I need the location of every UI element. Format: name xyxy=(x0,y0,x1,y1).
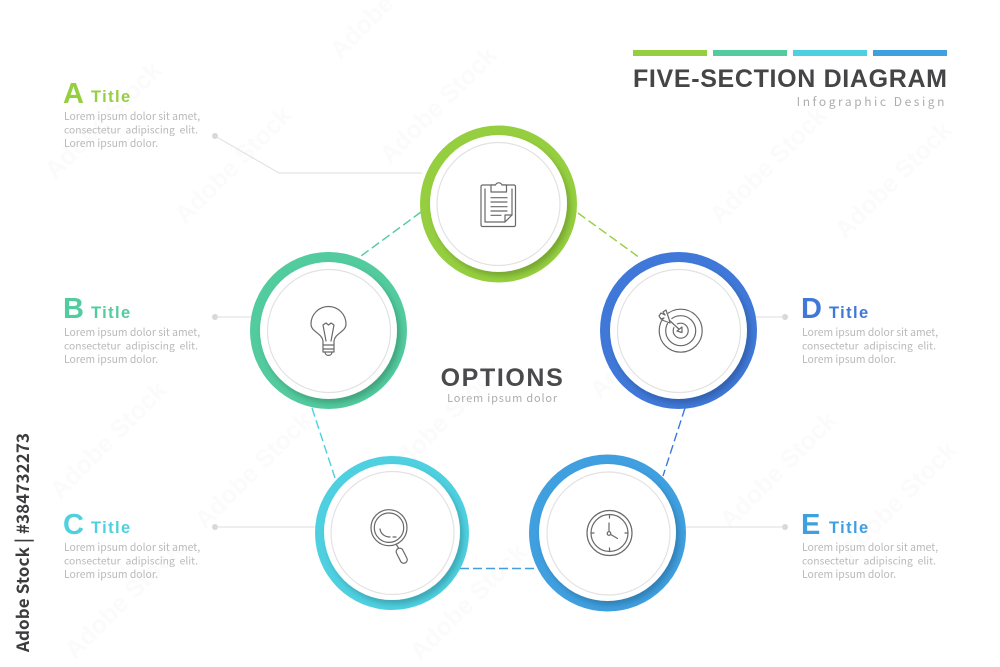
connector: B leader line xyxy=(212,314,252,320)
text block A xyxy=(63,78,200,150)
text block B xyxy=(63,293,200,366)
text block E: Title xyxy=(829,519,870,537)
watermark: Adobe Stock xyxy=(189,406,317,534)
dashed link C to E xyxy=(460,568,536,570)
circle B: light bulb xyxy=(250,252,407,409)
text block E: Lorem ipsum dolor. xyxy=(802,566,896,581)
text block E: Lorem ipsum dolor sit amet, xyxy=(802,539,938,554)
text block A: Lorem ipsum dolor sit amet, xyxy=(64,108,200,123)
stock id side label: Adobe Stock | #384732273 xyxy=(9,433,34,653)
connector: E leader line xyxy=(685,524,788,530)
dashed link A to D xyxy=(578,213,640,258)
text block D: D xyxy=(801,293,822,325)
title: FIVE-SECTION DIAGRAM xyxy=(633,65,947,93)
text block C xyxy=(63,509,200,581)
circle C: magnifier xyxy=(315,456,469,610)
text block D: Title xyxy=(829,304,870,322)
dashed link A to B xyxy=(361,212,421,256)
center label: OPTIONS xyxy=(441,364,564,392)
connector: A leader line xyxy=(212,133,422,173)
center label xyxy=(441,364,564,406)
icon: light bulb xyxy=(311,306,346,355)
text block A: A xyxy=(63,78,84,110)
text block B: Lorem ipsum dolor sit amet, xyxy=(64,324,200,339)
watermark: Adobe Stock xyxy=(584,276,712,404)
watermark: Adobe Stock xyxy=(834,436,962,564)
watermark: Adobe Stock xyxy=(829,116,957,244)
header color bars xyxy=(633,50,947,56)
circle A: clipboard xyxy=(420,126,577,282)
circle D: target xyxy=(600,252,757,409)
text block A: Lorem ipsum dolor. xyxy=(64,135,158,150)
watermark: Adobe Stock xyxy=(44,376,172,504)
text block E xyxy=(801,509,938,581)
connector: C leader line xyxy=(212,524,316,530)
dashed link B to C xyxy=(312,408,335,478)
watermark: Adobe Stock xyxy=(379,356,507,484)
icon: clipboard xyxy=(481,183,516,226)
text block C: consectetur adipiscing elit. xyxy=(64,552,198,568)
icon: clock xyxy=(587,510,632,556)
text block B: B xyxy=(63,293,84,325)
text block C: Lorem ipsum dolor sit amet, xyxy=(64,539,200,554)
text block C: Lorem ipsum dolor. xyxy=(64,566,158,581)
watermark: Adobe Stock xyxy=(704,101,832,229)
connector: D leader line xyxy=(755,314,788,320)
text block B: consectetur adipiscing elit. xyxy=(64,338,198,352)
watermark: Adobe Stock xyxy=(39,56,167,184)
text block D xyxy=(801,293,938,366)
dashed link D to E xyxy=(663,408,685,476)
text block B: Title xyxy=(91,304,132,322)
text block D: Lorem ipsum dolor. xyxy=(802,351,896,366)
text block A: consectetur adipiscing elit. xyxy=(64,122,198,136)
text block B: Lorem ipsum dolor. xyxy=(64,351,158,366)
watermark: Adobe Stock xyxy=(59,536,187,664)
watermark: Adobe Stock xyxy=(169,101,297,229)
text block D: Lorem ipsum dolor sit amet, xyxy=(802,324,938,339)
text block A: Title xyxy=(91,88,132,106)
watermark: Adobe Stock xyxy=(374,41,502,169)
text block C: Title xyxy=(91,519,132,537)
circle E: clock xyxy=(529,454,686,612)
text block D: consectetur adipiscing elit. xyxy=(802,338,936,352)
watermark: Adobe Stock xyxy=(714,406,842,534)
center label: Lorem ipsum dolor xyxy=(447,390,558,406)
text block E: consectetur adipiscing elit. xyxy=(802,552,936,568)
text block E: E xyxy=(801,509,820,541)
text block C: C xyxy=(63,509,84,541)
watermark: Adobe Stock xyxy=(404,538,532,666)
icon: magnifying glass xyxy=(371,510,408,564)
icon: target with arrow xyxy=(658,309,702,352)
subtitle: Infographic Design xyxy=(797,93,947,110)
